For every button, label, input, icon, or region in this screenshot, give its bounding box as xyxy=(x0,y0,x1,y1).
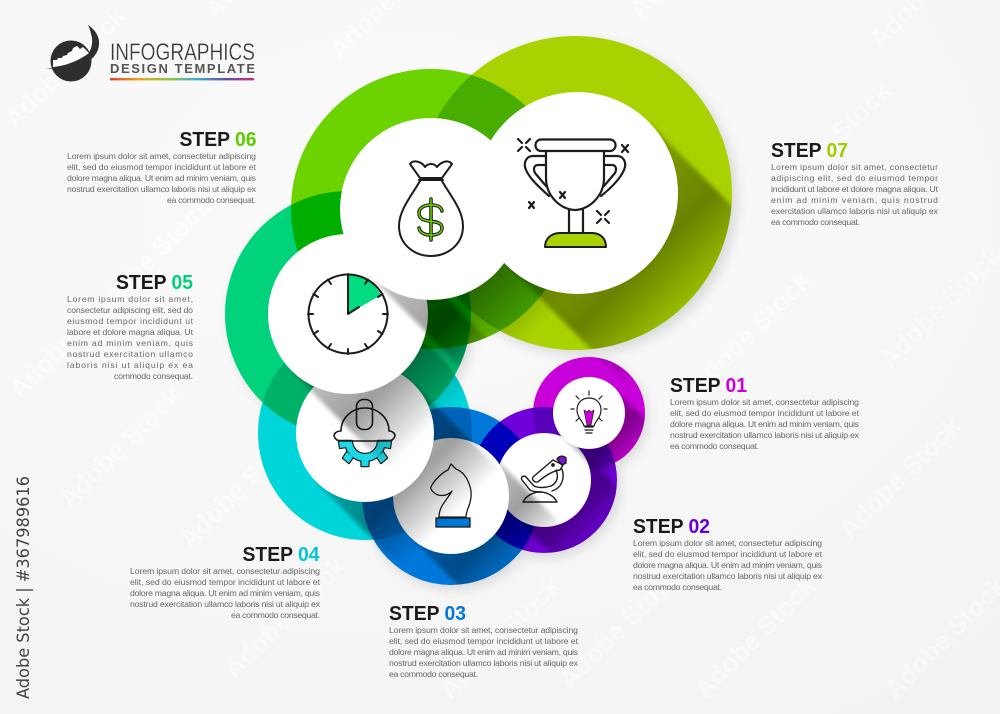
text block: step 01: dolore magna aliqua. Ut enim ad minim veniam, quis xyxy=(670,419,860,429)
text block: step 07: incididunt ut labore et dolore magna aliqua. Ut xyxy=(771,184,939,194)
text block: step 03: elit, sed do eiusmod tempor incididunt ut labore et xyxy=(389,636,579,646)
disc: step 01 light bulb xyxy=(553,377,645,478)
text block: step 07 xyxy=(771,140,939,227)
watermark pattern: Adobe Stock xyxy=(763,75,897,209)
ring: step 07 xyxy=(418,36,732,350)
text block: step 02: ea commodo consequat. xyxy=(633,582,722,592)
icon: chess knight xyxy=(431,464,471,527)
rainbow underline xyxy=(110,78,254,80)
text block: step 07: Lorem ipsum dolor sit amet, consectetur xyxy=(771,162,938,172)
text block: step 03: Lorem ipsum dolor sit amet, consectetur adipiscing xyxy=(389,625,578,635)
watermark pattern: Adobe xyxy=(3,326,81,404)
text block: step 01: elit, sed do eiusmod tempor incididunt ut labore et xyxy=(670,408,860,418)
disc: step 06 money bag xyxy=(340,118,559,366)
watermark pattern: Adobe Stock xyxy=(218,550,352,684)
watermark pattern: Adobe Stock xyxy=(553,560,687,694)
text block: step 06: ea commodo consequat. xyxy=(167,195,256,205)
text block: step 05: consectetur adipiscing elit, sed do xyxy=(67,305,193,315)
text block: step 05 xyxy=(67,272,194,381)
text block: step 01 xyxy=(670,375,860,451)
watermark pattern: Adobe Stock xyxy=(683,265,817,399)
text block: step 03 xyxy=(389,603,579,679)
icon: microscope xyxy=(521,456,566,502)
watermark pattern: Adobe Stock xyxy=(688,570,822,704)
text block: step 05: nostrud exercitation ullamco xyxy=(67,349,193,359)
text block: step 02: dolore magna aliqua. Ut enim ad minim veniam, quis xyxy=(633,560,823,570)
text block: step 03: dolore magna aliqua. Ut enim ad minim veniam, quis xyxy=(389,647,579,657)
ring: step 03 xyxy=(362,407,540,585)
watermark pattern: Adobe Stock xyxy=(83,190,217,324)
disc: step 04 helmet xyxy=(296,364,499,567)
text block: step 05: Lorem ipsum dolor sit amet, xyxy=(67,294,193,304)
text block: step 02 xyxy=(633,516,823,592)
text block: step 06: nostrud exercitation ullamco laboris nisi ut aliquip ex xyxy=(67,184,257,194)
side credit: Adobe Stock | #367989616 xyxy=(14,476,34,699)
watermark pattern: Adobe Stock xyxy=(53,380,187,514)
logo title: INFOGRAPHICS xyxy=(110,39,255,66)
watermark pattern: Adobe Stock xyxy=(0,0,132,134)
heading: step 04: STEP 04 xyxy=(242,544,320,566)
text block: step 07: enim ad minim veniam, quis nostrud xyxy=(771,195,938,205)
heading: step 01: STEP 01 xyxy=(670,375,747,397)
text block: step 02: elit, sed do eiusmod tempor incididunt ut labore et xyxy=(633,549,823,559)
text block: step 07: ea commodo consequat. xyxy=(771,217,860,227)
heading: step 06: STEP 06 xyxy=(180,129,256,151)
text block: step 05: enim ad minim veniam, quis xyxy=(67,338,194,348)
text block: step 01: Lorem ipsum dolor sit amet, consectetur adipiscing xyxy=(670,397,859,407)
watermark pattern: Adobe Stock xyxy=(433,570,567,704)
icon: helmet and gear xyxy=(334,400,395,466)
text block: step 01: ea commodo consequat. xyxy=(670,441,759,451)
logo xyxy=(45,25,255,82)
ring: step 01 xyxy=(533,357,645,469)
icon: light bulb xyxy=(571,391,607,433)
text block: step 05: eiusmod tempor incididunt ut xyxy=(67,316,194,326)
coloured rings xyxy=(225,36,732,585)
text block: step 03: nostrud exercitation ullamco laboris nisi ut aliquip ex xyxy=(389,658,579,668)
icon: money bag xyxy=(399,161,463,256)
text block: step 06: elit, sed do eiusmod tempor incididunt ut labore et xyxy=(67,162,257,172)
watermark pattern: Adobe Stock xyxy=(173,420,307,554)
text block: step 04: Lorem ipsum dolor sit amet, consectetur adipiscing xyxy=(130,566,320,576)
text block: step 04: nostrud exercitation ullamco laboris nisi ut aliquip ex xyxy=(130,599,321,609)
heading: step 02: STEP 02 xyxy=(633,516,710,538)
text block: step 06: Lorem ipsum dolor sit amet, consectetur adipiscing xyxy=(67,151,256,161)
text block: step 04: elit, sed do eiusmod tempor incididunt ut labore et xyxy=(130,577,321,587)
heading: step 05: STEP 05 xyxy=(116,272,193,294)
text block: step 04 xyxy=(130,544,321,620)
logo mark xyxy=(45,25,99,82)
icon: clock xyxy=(308,274,388,354)
disc: step 03 chess knight xyxy=(393,438,559,585)
text block: step 02: Lorem ipsum dolor sit amet, consectetur adipiscing xyxy=(633,538,822,548)
watermark pattern: Adobe Stock xyxy=(833,410,967,544)
text block: step 07: exercitation ullamco laboris nisi ut aliquip ex xyxy=(771,206,939,216)
icon: trophy xyxy=(518,139,628,247)
text block: step 04: dolore magna aliqua. Ut enim ad minim veniam, quis xyxy=(130,588,321,598)
disc: step 05 clock xyxy=(268,234,486,464)
text block: step 05: labore et dolore magna aliqua. Ut xyxy=(67,327,194,337)
ring: step 05 xyxy=(225,191,471,437)
heading: step 07: STEP 07 xyxy=(771,140,848,162)
text block: step 01: nostrud exercitation ullamco laboris nisi ut aliquip ex xyxy=(670,430,860,440)
disc: step 07 trophy xyxy=(490,92,732,381)
heading: step 03: STEP 03 xyxy=(389,603,466,625)
text block: step 02: nostrud exercitation ullamco laboris nisi ut aliquip ex xyxy=(633,571,823,581)
text block: step 05: laboris nisi ut aliquip ex ea xyxy=(67,360,193,370)
disc: step 02 microscope xyxy=(500,433,617,552)
ring: step 02 xyxy=(471,407,617,553)
ring: step 06 xyxy=(291,69,571,349)
text block: step 06: dolore magna aliqua. Ut enim ad minim veniam, quis xyxy=(67,173,257,183)
text block: step 03: ea commodo consequat. xyxy=(389,669,478,679)
text block: step 04: ea commodo consequat. xyxy=(231,610,320,620)
ring: step 04 xyxy=(258,326,472,540)
text block: step 06 xyxy=(67,129,257,205)
ring soft shadows xyxy=(229,41,737,589)
text block: step 07: adipiscing elit, sed do eiusmod tempor xyxy=(771,173,938,183)
text block: step 05: commodo consequat. xyxy=(114,371,193,381)
logo subtitle: DESIGN TEMPLATE xyxy=(110,61,255,76)
